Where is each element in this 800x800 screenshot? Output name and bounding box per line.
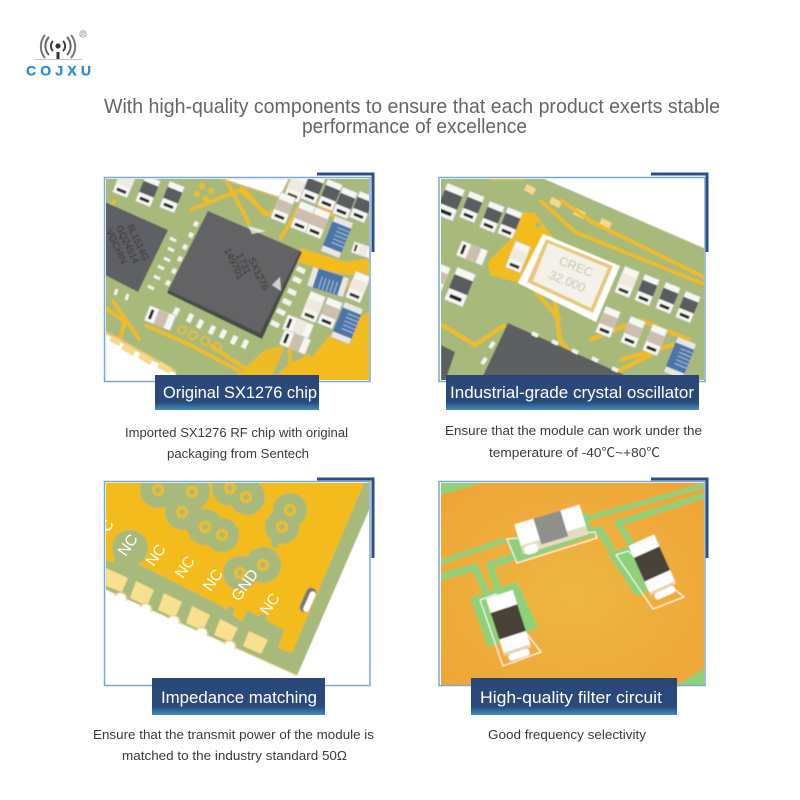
pin names: C bbox=[97, 516, 118, 535]
small chip bbox=[105, 202, 168, 292]
frame bbox=[104, 482, 370, 686]
pin names: GND bbox=[228, 566, 262, 604]
caption bbox=[93, 727, 375, 763]
components bbox=[112, 179, 136, 198]
label: High-quality filter circuit bbox=[480, 688, 662, 707]
caption: packaging from Sentech bbox=[167, 446, 309, 461]
white outlines bbox=[480, 532, 684, 666]
caption: matched to the industry standard 50Ω bbox=[122, 748, 347, 763]
label: Original SX1276 chip bbox=[163, 383, 317, 402]
frame accent bbox=[317, 479, 373, 558]
frame bbox=[439, 178, 705, 382]
component left bbox=[486, 590, 533, 662]
castellated pads bbox=[106, 568, 268, 654]
label bbox=[152, 678, 325, 715]
PCB image: SX1276: SX1276 bbox=[245, 256, 270, 293]
components bbox=[441, 182, 466, 222]
label bbox=[471, 678, 677, 715]
caption: temperature of -40℃~+80℃ bbox=[489, 445, 660, 460]
label: Industrial-grade crystal oscillator bbox=[450, 383, 694, 402]
label: Impedance matching bbox=[161, 688, 317, 707]
component center bbox=[514, 505, 589, 556]
slot bbox=[299, 586, 317, 614]
crystal: 32.000 bbox=[547, 268, 588, 295]
crystal corner bbox=[218, 178, 290, 198]
PCB image: SX1276 bbox=[103, 166, 375, 382]
PCB image: filter bbox=[439, 481, 706, 686]
green pads and vias bbox=[110, 470, 307, 620]
pin names: NC bbox=[143, 541, 170, 569]
PCB image: SX1276: 1731 bbox=[233, 252, 253, 277]
caption: Ensure that the transmit power of the module is bbox=[93, 727, 375, 742]
caption bbox=[445, 423, 702, 460]
frame accent bbox=[651, 174, 707, 252]
PCB image: SX1276: 8L1514G bbox=[124, 223, 151, 263]
logo wordmark: COJXU bbox=[26, 62, 91, 78]
caption: Imported SX1276 RF chip with original bbox=[125, 425, 348, 440]
PCB image: pads bbox=[106, 483, 369, 676]
label bbox=[446, 375, 699, 410]
frame accent bbox=[651, 479, 707, 558]
pin names: NC bbox=[257, 590, 284, 618]
frame bbox=[439, 482, 705, 686]
panel: industrial-grade crystal oscillator bbox=[425, 174, 707, 460]
panel: impedance matching bbox=[93, 470, 375, 763]
logo: COJXU bbox=[26, 31, 91, 78]
title: performance of excellence bbox=[302, 116, 527, 138]
label bbox=[155, 375, 319, 410]
caption: Ensure that the module can work under the bbox=[445, 423, 702, 438]
outside white cut bbox=[104, 506, 371, 684]
crystal bbox=[518, 234, 620, 322]
pin names: NC bbox=[172, 553, 199, 581]
icon: signal antenna: R bbox=[81, 32, 85, 38]
component right bbox=[629, 535, 679, 602]
PCB image: crystal bbox=[425, 177, 706, 382]
title bbox=[104, 96, 720, 138]
PCB image: SX1276: VGCHIN bbox=[103, 228, 129, 266]
caption bbox=[125, 425, 348, 461]
pin names: NC bbox=[200, 566, 227, 594]
panel: original SX1276 chip bbox=[103, 166, 375, 461]
pin names bbox=[106, 520, 278, 616]
PCB image: SX1276: 149701 bbox=[221, 247, 246, 282]
title: With high-quality components to ensure that each product exerts stable bbox=[104, 96, 720, 118]
chip bottom bbox=[482, 322, 626, 375]
panel: high-quality filter circuit bbox=[439, 479, 707, 742]
pin names: NC bbox=[115, 531, 142, 559]
crystal: CREC bbox=[557, 254, 595, 280]
frame accent bbox=[317, 174, 373, 252]
PCB image: SX1276: GQ24514 bbox=[113, 224, 141, 266]
main chip bbox=[166, 250, 302, 340]
caption: Good frequency selectivity bbox=[488, 727, 647, 742]
frame bbox=[104, 178, 370, 382]
